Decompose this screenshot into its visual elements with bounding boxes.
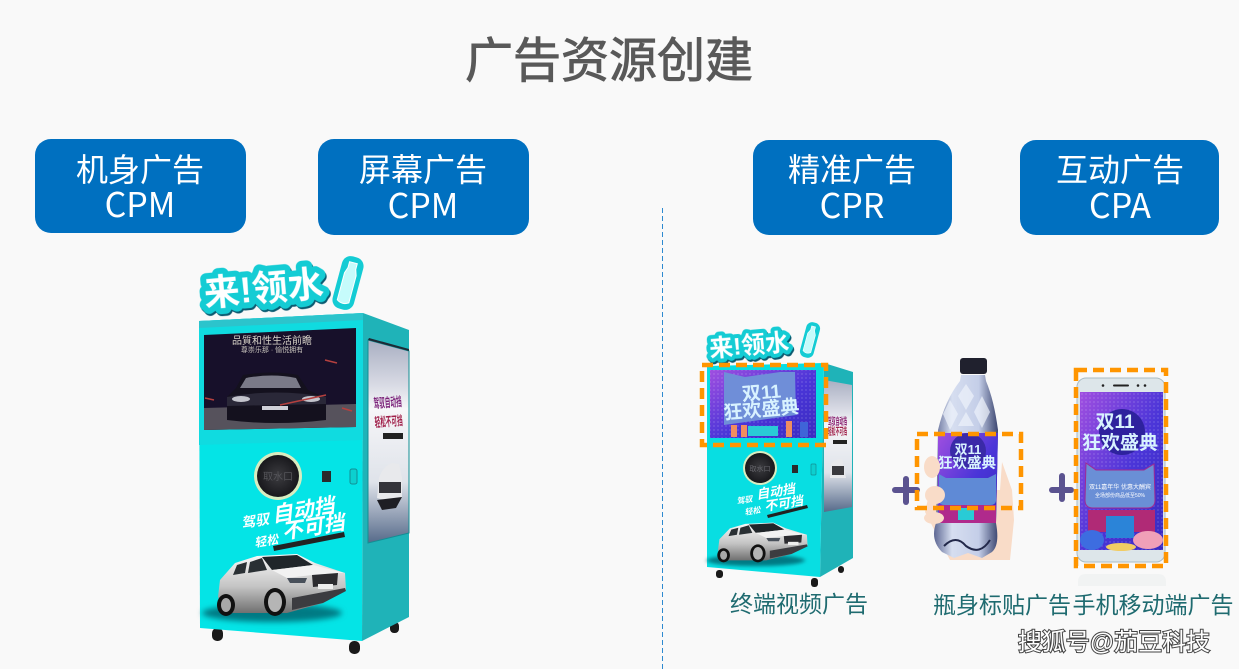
small vending machine (702, 321, 853, 587)
small coin slot: 取水口 (750, 464, 770, 473)
phone screen ad (1080, 392, 1163, 551)
bottle diamonds (943, 384, 990, 430)
machine slogan: 驾驭 (240, 510, 272, 531)
phone screen ad: 全场部份商品低至50% (1095, 492, 1146, 499)
neon sign (202, 254, 366, 314)
phone screen ad: 双11 (1095, 412, 1135, 433)
bottle label: 狂欢盛典 (938, 454, 996, 472)
small slogan: 自动挡 (755, 481, 798, 502)
bottle base (944, 540, 990, 550)
button: 互动广告 CPA: 互动广告 (1056, 145, 1184, 191)
button: 屏幕广告 CPM: 屏幕广告 (359, 145, 487, 191)
small slogan: 驾驭 (736, 494, 755, 506)
caption: 终端视频广告: 终端视频广告 (730, 591, 868, 617)
car on machine (202, 554, 346, 622)
bottle with hand (917, 358, 1021, 560)
watermark: 搜狐号@茄豆科技 (1018, 629, 1210, 656)
phone speaker (1102, 384, 1146, 387)
phone body (1077, 378, 1165, 562)
small machine screen ad (710, 370, 816, 438)
orange highlight: screen (702, 365, 826, 445)
coin slot (254, 452, 302, 500)
button: 机身广告 CPM: CPM (105, 178, 175, 227)
phone reflection (1078, 574, 1166, 586)
caption: 手机移动端广告: 手机移动端广告 (1072, 592, 1234, 618)
button: 精准广告 CPR: CPR (820, 179, 884, 228)
machine slogan: 轻松 (253, 532, 281, 550)
coin slot: 取水口 (263, 471, 293, 483)
small machine screen ad: 狂欢盛典 (723, 395, 800, 424)
small neon sign: 来!领水 (708, 329, 790, 363)
bottle label: 双11 (955, 442, 981, 457)
button: 精准广告 CPR (753, 140, 952, 235)
large vending machine (199, 254, 409, 654)
screen with car ad: 品質和性生活前瞻 (232, 334, 312, 347)
small vending machine: 驾驭自动挡 (828, 415, 847, 428)
screen with car ad: 尊崇乐那 · 愉悦拥有 (241, 345, 303, 354)
small vending machine: 轻松不可挡 (828, 425, 847, 438)
bottle body (934, 375, 998, 558)
small slogan (736, 481, 806, 517)
button: 机身广告 CPM (35, 139, 246, 233)
button: 屏幕广告 CPM: CPM (388, 179, 458, 228)
orange highlight: label (917, 434, 1021, 508)
bottle cap (960, 358, 987, 374)
screen with car ad (204, 328, 356, 430)
plus sign 1 (892, 476, 920, 505)
handle (350, 469, 357, 484)
phone screen ad: 双11嘉年华 优惠大酬宾 (1089, 483, 1151, 491)
side panel ad: 驾驭自动挡 (373, 394, 402, 411)
scanner (322, 471, 331, 482)
title: 广告资源创建 (465, 21, 753, 91)
small slogan: 轻松 (744, 505, 762, 517)
hand (925, 462, 1014, 560)
button: 机身广告 CPM: 机身广告 (76, 145, 204, 191)
small machine side panel (824, 380, 852, 512)
slogan strip (273, 532, 345, 551)
machine wheels (212, 622, 399, 654)
button: 精准广告 CPR: 精准广告 (788, 145, 916, 191)
orange highlight: phone (1076, 370, 1166, 566)
plus sign 2 (1049, 473, 1074, 502)
phone screen ad: 狂欢盛典 (1082, 431, 1158, 454)
machine side (362, 313, 409, 641)
small car (707, 523, 808, 566)
neon sign: 来!领水 (202, 263, 325, 314)
small slogan: 不可挡 (763, 493, 806, 514)
fingers (924, 456, 945, 524)
small neon sign (708, 321, 821, 363)
center divider (662, 208, 664, 669)
small machine screen ad: 双11 (741, 381, 782, 406)
machine slogan: 自动挡 (270, 494, 339, 527)
bottle label (938, 433, 998, 523)
side panel ad (368, 338, 409, 543)
side panel ad: 轻松不可挡 (374, 413, 403, 430)
machine slogan (240, 494, 349, 550)
button: 互动广告 CPA: CPA (1089, 179, 1151, 228)
small coin slot (743, 451, 777, 485)
machine slogan: 不可挡 (280, 511, 349, 544)
button: 互动广告 CPA (1020, 140, 1219, 235)
machine front (199, 313, 363, 641)
caption: 瓶身标贴广告: 瓶身标贴广告 (933, 592, 1071, 618)
button: 屏幕广告 CPM (318, 139, 529, 235)
phone (1076, 370, 1166, 586)
